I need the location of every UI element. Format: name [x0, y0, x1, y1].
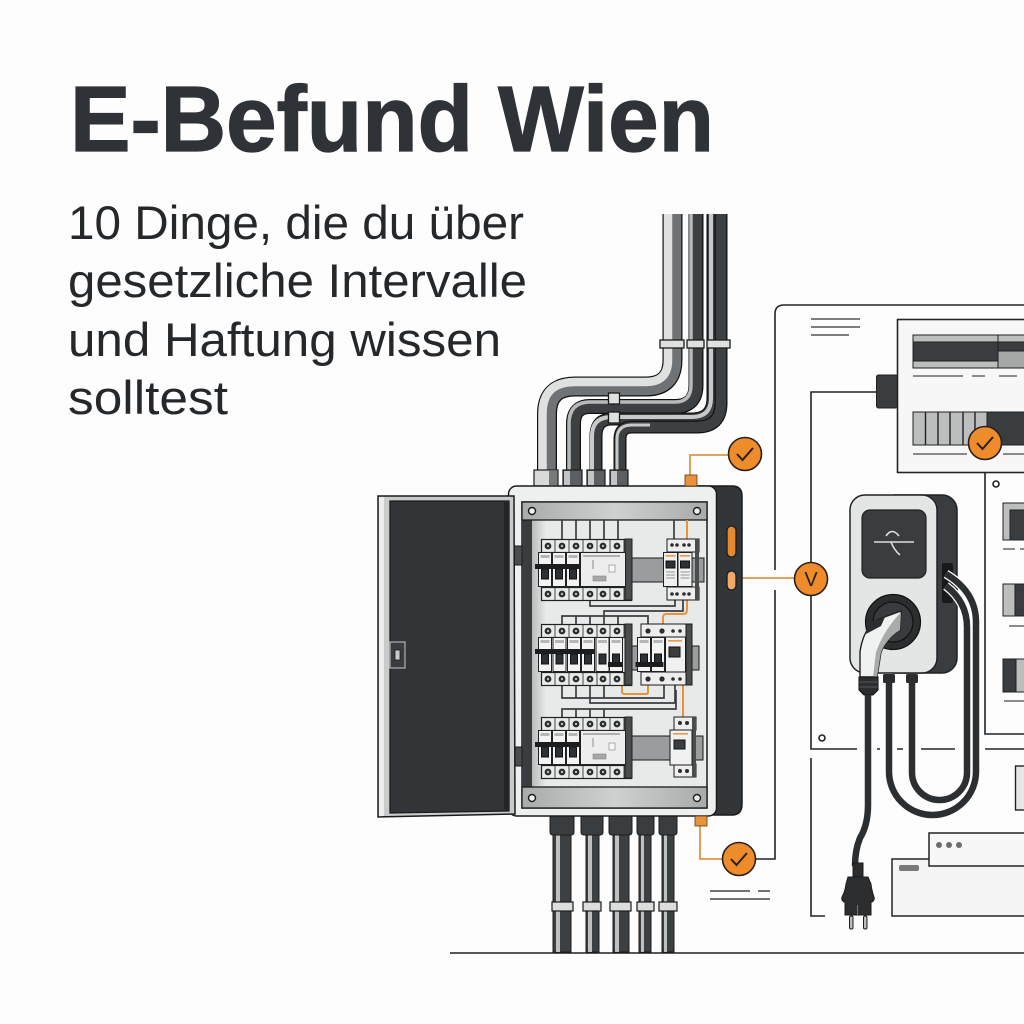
power cord	[855, 695, 868, 866]
charging plug	[860, 611, 901, 677]
cable slot	[942, 563, 953, 603]
document panel	[898, 320, 1024, 472]
lines below badge	[710, 891, 770, 899]
orange connection lines	[690, 455, 794, 859]
display symbol	[874, 532, 914, 555]
breaker row 1 surge modules	[664, 539, 699, 600]
cable stubs	[883, 674, 895, 683]
charger socket and plug	[858, 594, 920, 695]
wiring	[562, 520, 683, 717]
connector block	[876, 375, 898, 408]
subtitle: 10 Dinge, die du über	[68, 196, 524, 249]
breaker row 3 right module	[670, 717, 696, 777]
socket	[866, 594, 920, 650]
voltage badge: V	[804, 569, 818, 591]
subtitle: gesetzliche Intervalle	[68, 254, 527, 307]
check badge bottom	[722, 842, 756, 876]
breaker row 3	[535, 717, 632, 778]
bar chart strip top	[913, 335, 1024, 368]
pipe 1	[542, 214, 672, 472]
subtitle	[68, 196, 527, 424]
subtitle: und Haftung wissen	[68, 313, 501, 366]
wallbox charger	[850, 495, 957, 673]
breaker row 2	[535, 624, 632, 686]
wall plate and schematic outlines	[755, 305, 1024, 916]
check badge top	[728, 438, 762, 470]
breaker row 1	[535, 539, 632, 600]
title: E-Befund Wien	[70, 67, 714, 171]
pipe 3	[592, 214, 713, 472]
display	[862, 510, 926, 578]
wallbox cables	[889, 574, 976, 815]
breaker row 2 right group	[636, 624, 692, 685]
inner frame	[522, 502, 707, 808]
bottom glands	[550, 815, 677, 835]
cable clamps	[552, 902, 677, 911]
cabinet door	[378, 496, 515, 817]
voltage badge	[794, 562, 828, 596]
cabinet vents	[727, 526, 736, 590]
check badge on document	[968, 426, 1002, 460]
strain relief	[859, 677, 878, 695]
subtitle: solltest	[68, 371, 228, 424]
conduit pipes	[542, 214, 721, 472]
floor line	[450, 952, 1024, 954]
lower device boxes	[892, 833, 1024, 916]
right schematic panel	[985, 473, 1024, 810]
door latch	[390, 642, 405, 668]
orange wire	[622, 520, 687, 717]
bar chart strip bottom	[913, 412, 1024, 445]
door hinges	[514, 546, 522, 766]
pipe glands	[534, 470, 628, 486]
bottom cables	[550, 815, 677, 952]
pipe 2	[569, 214, 696, 472]
cabinet body	[508, 486, 716, 816]
cabinet back	[690, 486, 742, 815]
pipe clamps	[608, 340, 730, 423]
din rails	[632, 558, 704, 760]
orange tabs	[685, 475, 707, 826]
top rail	[522, 502, 707, 520]
bottom rail	[522, 787, 707, 808]
schuko plug	[842, 863, 874, 929]
pipe 4	[617, 214, 721, 472]
